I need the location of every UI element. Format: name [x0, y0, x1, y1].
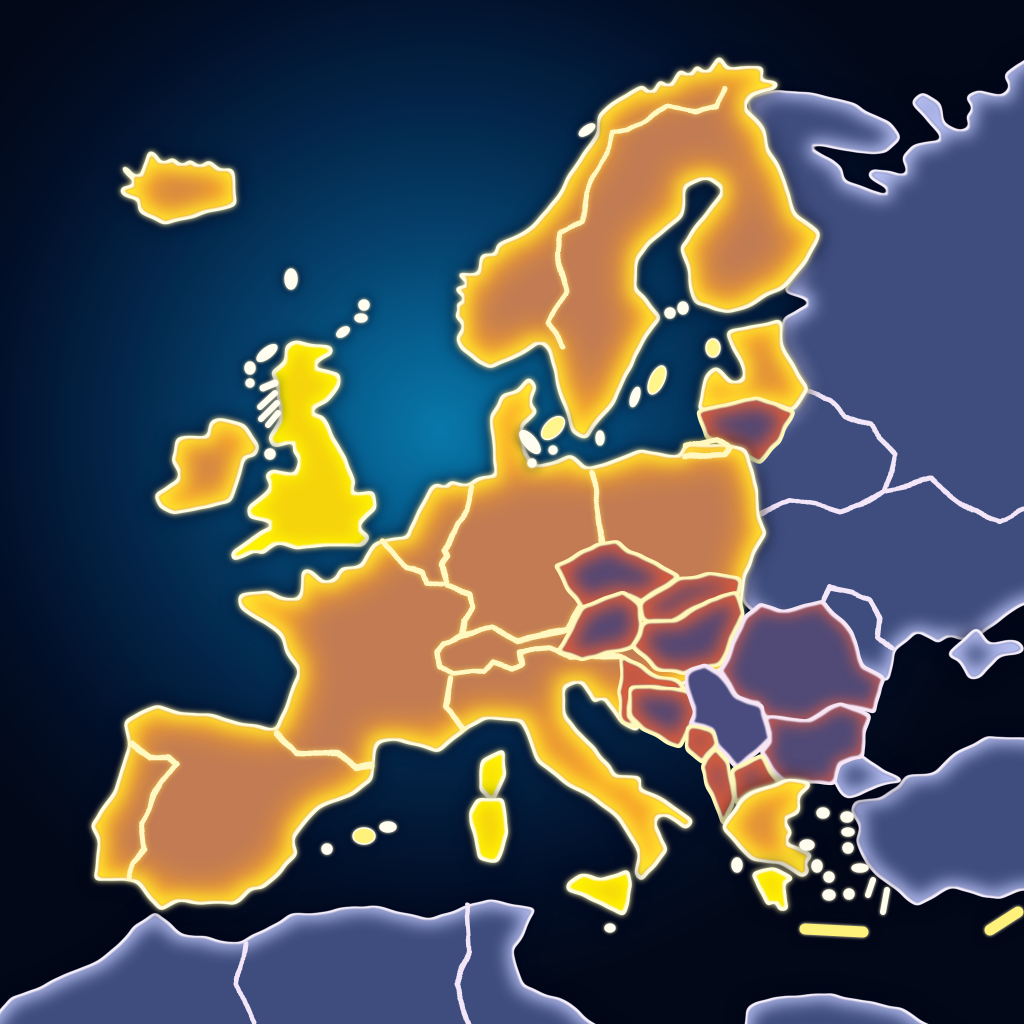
Hungary — [633, 593, 743, 673]
North Macedonia — [733, 757, 778, 803]
European Turkey — [833, 757, 903, 798]
non-highlighted eastern land — [745, 40, 1024, 678]
Turkey — [852, 738, 1024, 903]
Ireland — [157, 420, 258, 513]
Austria — [557, 593, 643, 660]
eastern borders — [755, 392, 1024, 648]
Great Britain — [232, 342, 375, 558]
Norway-Sweden border — [550, 90, 723, 347]
North Africa west — [0, 900, 660, 1024]
Albania — [703, 750, 733, 823]
Montenegro — [687, 727, 715, 762]
mainland western and central Europe — [93, 378, 765, 908]
Crimea — [948, 630, 1022, 677]
Lithuania — [700, 398, 793, 462]
Serbia — [687, 665, 770, 767]
Rhodes — [990, 912, 1018, 930]
Czechia — [555, 545, 677, 607]
Sicily — [567, 872, 632, 913]
Bosnia — [630, 687, 695, 747]
Romania — [722, 602, 883, 722]
Sardinia — [472, 800, 507, 860]
Peloponnese — [753, 870, 793, 910]
Estonia and Latvia — [700, 320, 808, 410]
Croatia — [620, 657, 687, 727]
North Africa east — [735, 996, 1000, 1024]
Bulgaria — [760, 705, 868, 782]
Crete — [805, 929, 863, 932]
Corsica — [481, 752, 505, 800]
Iceland — [122, 152, 235, 223]
Scandinavia — [455, 57, 818, 437]
Greece mainland — [723, 780, 810, 875]
Slovakia — [643, 575, 740, 620]
north Africa borders — [238, 905, 470, 1024]
small islands — [245, 122, 887, 932]
western country borders — [130, 440, 730, 878]
